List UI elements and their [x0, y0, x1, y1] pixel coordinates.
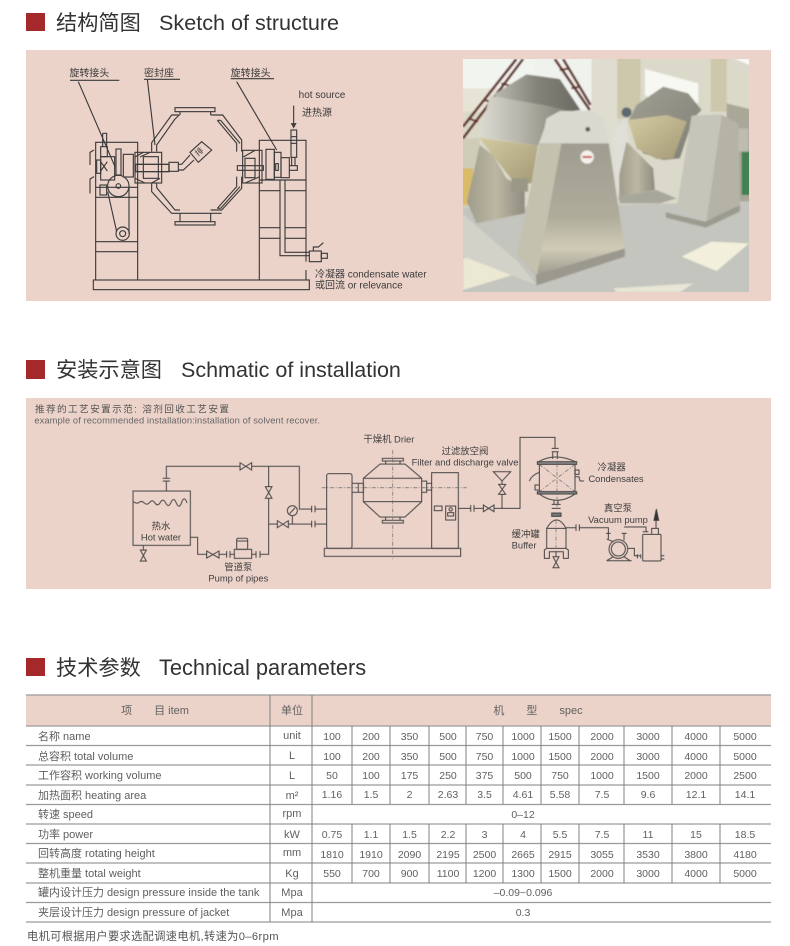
label: seal seat: 密封座 — [144, 67, 174, 80]
row: name values: 1500 — [548, 731, 572, 743]
label: buffer: 缓冲罐 — [512, 528, 540, 539]
row: power values: 0.75 — [322, 829, 342, 841]
row: working volume values: 175 — [401, 770, 418, 782]
row: total volume values: 4000 — [684, 751, 708, 763]
label: heat inlet: 进热源 — [302, 106, 332, 119]
section 3 heading: 技术参数 — [56, 656, 141, 680]
row: rotating height values: 3800 — [684, 849, 708, 861]
octagonal vessel — [152, 108, 242, 225]
label: buffer: Buffer — [512, 539, 537, 550]
row: rotating height values: 2195 — [436, 849, 460, 861]
row: heating area values: 12.1 — [686, 789, 706, 801]
row: total volume values — [323, 751, 757, 763]
unit column: Mpa — [281, 887, 304, 899]
row: total volume values: 750 — [476, 751, 493, 763]
row: working volume values — [326, 770, 757, 782]
label: discharge glyph: 排 — [193, 145, 205, 158]
row: total weight values: 5000 — [733, 868, 757, 880]
row labels: 罐内设计压力 design pressure inside the tank — [38, 885, 260, 899]
row: total volume values: 500 — [439, 751, 457, 763]
unit column: m² — [286, 790, 299, 802]
row: heating area values — [322, 789, 755, 801]
row: working volume values: 50 — [326, 770, 338, 782]
row labels: 夹层设计压力 design pressure of jacket — [38, 906, 229, 919]
row: name values: 3000 — [636, 731, 660, 743]
installation diagram — [34, 404, 664, 583]
row: working volume values: 2500 — [733, 770, 757, 782]
condenser system — [458, 437, 664, 568]
label: condensate water: 冷凝器 condensate water — [315, 267, 427, 280]
row: total weight values: 3000 — [636, 868, 660, 880]
row: working volume values: 375 — [476, 770, 493, 782]
label: vacuum pump: Vacuum pump — [588, 514, 648, 525]
row: power values: 3 — [482, 829, 488, 841]
row: name values: 4000 — [684, 731, 708, 743]
row: total weight values: 1200 — [473, 868, 496, 880]
label: hot water: 热水 — [152, 521, 170, 532]
unit column: rpm — [283, 808, 301, 820]
row: rotating height values: 4180 — [733, 849, 757, 861]
row: working volume values: 250 — [439, 770, 457, 782]
row labels: 总容积 total volume — [38, 749, 133, 763]
label: rotary joint left: 旋转接头 — [69, 67, 109, 80]
unit column: L — [289, 770, 295, 782]
row: power values: 5.5 — [553, 829, 567, 841]
row: power values: 4 — [520, 829, 526, 841]
section 2 heading marker — [26, 360, 45, 379]
row: heating area values: 4.61 — [513, 789, 533, 801]
unit column: kW — [284, 829, 301, 841]
row: rotating height values: 2915 — [548, 849, 572, 861]
label: or relevance: 或回流 or relevance — [315, 279, 403, 292]
row labels: 名称 name — [38, 729, 91, 743]
unit column: unit — [283, 730, 301, 742]
label: pump of pipes: Pump of pipes — [208, 572, 269, 583]
technical parameters table — [26, 695, 771, 922]
row labels: 加热面积 heating area — [38, 789, 147, 802]
row: rotating height values: 2090 — [398, 849, 421, 861]
row: rotating height values: 3055 — [590, 849, 614, 861]
row: name values: 500 — [439, 731, 457, 743]
drier machine — [324, 458, 461, 556]
row: power values: 18.5 — [735, 829, 755, 841]
row: total weight values: 700 — [362, 868, 380, 880]
buffer tank — [544, 520, 608, 568]
row: total volume values: 100 — [323, 751, 341, 763]
label underlines and arrow — [70, 79, 296, 145]
label: vacuum pump: 真空泵 — [604, 503, 632, 514]
row: total volume values: 2000 — [590, 751, 614, 763]
row: total volume values: 350 — [401, 751, 418, 763]
row: rotating height values: 2665 — [511, 849, 535, 861]
row: working volume values: 750 — [551, 770, 569, 782]
valves — [140, 463, 297, 561]
row: rotating height values: 1910 — [359, 849, 383, 861]
pump of pipes — [234, 538, 252, 558]
schematic line work — [133, 437, 664, 568]
row: heating area values: 14.1 — [735, 789, 755, 801]
row: name values: 1000 — [511, 731, 535, 743]
panel: installation schematic — [26, 398, 771, 589]
label: filter and discharge valve: 过滤放空阀 — [442, 445, 488, 456]
row: total weight values: 1300 — [511, 868, 535, 880]
row: working volume values: 2000 — [684, 770, 708, 782]
drier centre lines — [322, 450, 467, 559]
row: total weight values: 1500 — [548, 868, 572, 880]
row: heating area values: 1.5 — [364, 789, 378, 801]
row: rotating height values: 1810 — [320, 849, 344, 861]
row: heating area values: 7.5 — [595, 789, 609, 801]
row: name values: 100 — [323, 731, 341, 743]
row: power values: 1.5 — [402, 829, 417, 841]
unit column: mm — [283, 847, 301, 859]
section 1 heading: 结构简图 — [56, 11, 141, 35]
unit column — [281, 730, 304, 919]
hot water tank — [133, 491, 190, 545]
table header band — [26, 695, 771, 726]
label: condenser: Condensates — [588, 473, 644, 484]
row: power values — [322, 829, 755, 841]
label: drier: 干燥机 Drier — [363, 433, 414, 444]
label: rotary joint right: 旋转接头 — [231, 67, 271, 80]
photo details — [460, 55, 753, 295]
condenser cross lines — [539, 455, 575, 507]
row: power values: 11 — [643, 829, 654, 841]
section 2 heading: 安装示意图 — [56, 358, 162, 382]
row labels: 功率 power — [38, 827, 93, 841]
panel: sketch of structure — [26, 50, 771, 301]
row labels: 整机重量 total weight — [38, 866, 141, 880]
row: working volume values: 1000 — [590, 770, 614, 782]
section 1 heading marker — [26, 13, 45, 31]
discharge line and funnel valve — [458, 437, 555, 512]
row labels: 转速 speed — [38, 807, 93, 821]
row: rotating height values: 3530 — [636, 849, 660, 861]
header row: 项 目 item — [121, 704, 189, 717]
row: name values: 5000 — [733, 731, 757, 743]
row: heating area values: 3.5 — [477, 789, 492, 801]
row labels — [38, 729, 260, 919]
row labels: 回转高度 rotating height — [38, 846, 155, 860]
row: speed value: 0–12 — [511, 809, 535, 821]
row labels: 工作容积 working volume — [38, 768, 161, 782]
row: total weight values: 2000 — [590, 868, 614, 880]
machine line work — [70, 79, 327, 290]
row: name values: 350 — [401, 731, 418, 743]
row: heating area values: 2 — [407, 789, 413, 801]
footnote: 电机可根据用户要求选配调速电机,转速为0–6rpm — [27, 929, 279, 943]
row: total volume values: 3000 — [636, 751, 660, 763]
row: power values: 15 — [690, 829, 702, 841]
row: heating area values: 5.58 — [550, 789, 570, 801]
row: power values: 1.1 — [364, 829, 378, 841]
unit column: L — [289, 750, 295, 762]
photo of double cone dryers — [460, 55, 753, 295]
recommendation note English: example of recommended installation:installation of solvent recover. — [34, 416, 320, 426]
row: working volume values: 1500 — [636, 770, 660, 782]
row: total volume values: 1500 — [548, 751, 572, 763]
section 2 heading: Schmatic of installation — [181, 358, 401, 382]
row: total weight values: 4000 — [684, 868, 708, 880]
row: working volume values: 100 — [362, 770, 380, 782]
right drive and rotary joint — [237, 82, 327, 262]
row: tank design pressure value: –0.09~0.096 — [494, 887, 552, 899]
buffer centre line — [555, 520, 557, 552]
row: total volume values: 1000 — [511, 751, 535, 763]
label: filter and discharge valve: Filter and discharge valve — [412, 456, 518, 467]
condenser — [529, 448, 584, 516]
section 3 heading marker — [26, 658, 45, 676]
row: rotating height values — [320, 849, 757, 861]
row: heating area values: 9.6 — [641, 789, 655, 801]
row: total volume values: 5000 — [733, 751, 757, 763]
row: jacket design pressure value: 0.3 — [516, 907, 530, 919]
row: working volume values: 500 — [514, 770, 532, 782]
row: power values: 7.5 — [595, 829, 609, 841]
unit column: Kg — [285, 868, 299, 880]
row: total volume values: 200 — [362, 751, 380, 763]
row: name values: 200 — [362, 731, 380, 743]
row: rotating height values: 2500 — [473, 849, 496, 861]
label: condenser: 冷凝器 — [598, 462, 626, 473]
row: name values — [323, 731, 757, 743]
header row — [121, 703, 583, 717]
row: name values: 750 — [476, 731, 493, 743]
row: total weight values: 1100 — [437, 868, 459, 880]
row: total weight values: 900 — [401, 868, 418, 880]
row: heating area values: 2.63 — [438, 789, 458, 801]
row: total weight values — [323, 868, 757, 880]
left drive and rotary joint — [78, 82, 212, 240]
structure diagram — [69, 67, 427, 292]
row: power values: 2.2 — [441, 829, 455, 841]
recommendation note Chinese: 推荐的工艺安置示范: 溶剂回收工艺安置 — [35, 404, 229, 416]
row: name values: 2000 — [590, 731, 614, 743]
piping — [143, 466, 327, 558]
label: pump of pipes: 管道泵 — [224, 561, 252, 572]
row: total weight values: 550 — [323, 868, 341, 880]
header row: 机 型 spec — [493, 703, 583, 717]
vacuum pump — [606, 509, 664, 561]
section 1 heading: Sketch of structure — [159, 10, 339, 35]
header row: 单位 — [281, 703, 303, 717]
label: hot water: Hot water — [141, 531, 181, 542]
section 3 heading: Technical parameters — [159, 655, 366, 680]
unit column: Mpa — [281, 907, 304, 919]
label: hot source: hot source — [299, 90, 346, 101]
table grid — [26, 695, 771, 922]
machine base and frames — [93, 140, 309, 290]
row: heating area values: 1.16 — [322, 789, 342, 801]
